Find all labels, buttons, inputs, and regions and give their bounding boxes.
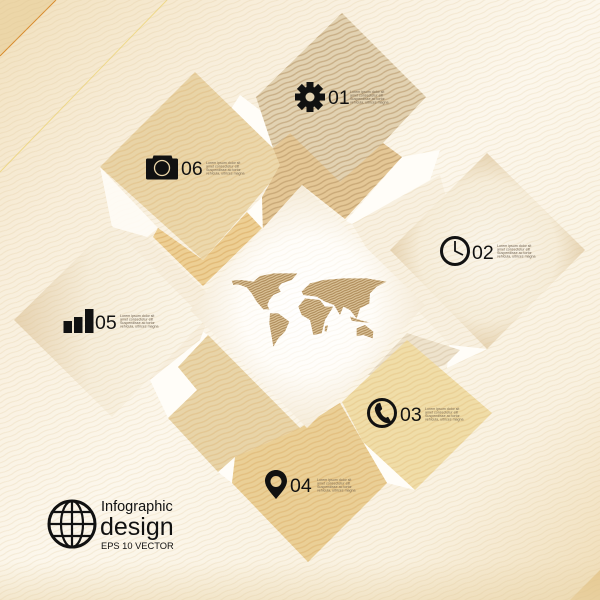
panel: centre world square: [190, 185, 425, 428]
panel: 02 clock square: [390, 153, 585, 349]
panel: left lower stack: [168, 335, 300, 472]
item 05: vehicula, ultrices magna: [120, 324, 159, 328]
item 02: [442, 238, 536, 264]
panel: 06 lower fold: [153, 212, 262, 286]
item 03: Lorem ipsum dolor sit: [425, 407, 459, 411]
panel: 03 upper fold: [368, 333, 460, 375]
item 06: [146, 156, 245, 180]
item 03: [368, 400, 464, 426]
icon: camera: [146, 156, 178, 180]
item 05: Suspendisse ac tortor: [120, 321, 156, 325]
item 06: vehicula, ultrices magna: [206, 172, 245, 176]
item 06: amet consectetur elit: [206, 164, 239, 168]
item 02: amet consectetur elit: [497, 248, 530, 252]
item 02: Lorem ipsum dolor sit: [497, 244, 531, 248]
item 05: 05: [95, 312, 117, 334]
item 03: 03: [400, 404, 422, 426]
title block: EPS 10 VECTOR: [101, 541, 174, 551]
item 04: vehicula, ultrices magna: [317, 488, 356, 492]
title block: [100, 499, 174, 551]
item 02: vehicula, ultrices magna: [497, 254, 536, 258]
panel: 06 camera square: [100, 72, 285, 260]
item 06: 06: [181, 158, 203, 180]
icon: clock: [442, 238, 468, 264]
item 05: [64, 309, 159, 334]
panel: 01 gear square: [256, 13, 426, 182]
icon: globe: [49, 501, 95, 547]
item 01: Lorem ipsum dolor sit: [350, 90, 384, 94]
item 04: 04: [290, 475, 312, 497]
panel: white notches behind squares: [100, 95, 487, 490]
icon: gear: [295, 82, 325, 112]
item 04: Suspendisse ac tortor: [317, 485, 353, 489]
panel: 05 back layer: [112, 227, 215, 380]
item 02: 02: [472, 242, 494, 264]
item 01: vehicula, ultrices magna: [350, 100, 389, 104]
icon: bar chart: [64, 309, 94, 333]
panel: 01 lower fold: [262, 133, 402, 228]
icon: map pin: [265, 470, 287, 499]
item 01: amet consectetur elit: [350, 94, 383, 98]
item 04: [265, 470, 356, 499]
panel: 05 bars square: [14, 225, 205, 417]
panel: white triangle: [247, 197, 262, 228]
item 01: 01: [328, 87, 350, 109]
title block: Infographic: [101, 499, 173, 515]
item 06: Suspendisse ac tortor: [206, 168, 242, 172]
title block: design: [100, 513, 174, 541]
item 05: amet consectetur elit: [120, 318, 153, 322]
item 03: amet consectetur elit: [425, 410, 458, 414]
panel: 04 pin square: [232, 403, 387, 562]
panel: 02 back layer: [352, 175, 487, 349]
item 04: amet consectetur elit: [317, 482, 350, 486]
item 04: Lorem ipsum dolor sit: [317, 478, 351, 482]
world map: [232, 273, 387, 347]
item 03: Suspendisse ac tortor: [425, 414, 461, 418]
item 05: Lorem ipsum dolor sit: [120, 314, 154, 318]
item 02: Suspendisse ac tortor: [497, 251, 533, 255]
icon: phone: [368, 400, 396, 426]
item 06: Lorem ipsum dolor sit: [206, 161, 240, 165]
item 01: Suspendisse ac tortor: [350, 97, 386, 101]
panel: 03 phone square: [342, 340, 492, 490]
item 03: vehicula, ultrices magna: [425, 418, 464, 422]
item 01: [295, 82, 389, 112]
